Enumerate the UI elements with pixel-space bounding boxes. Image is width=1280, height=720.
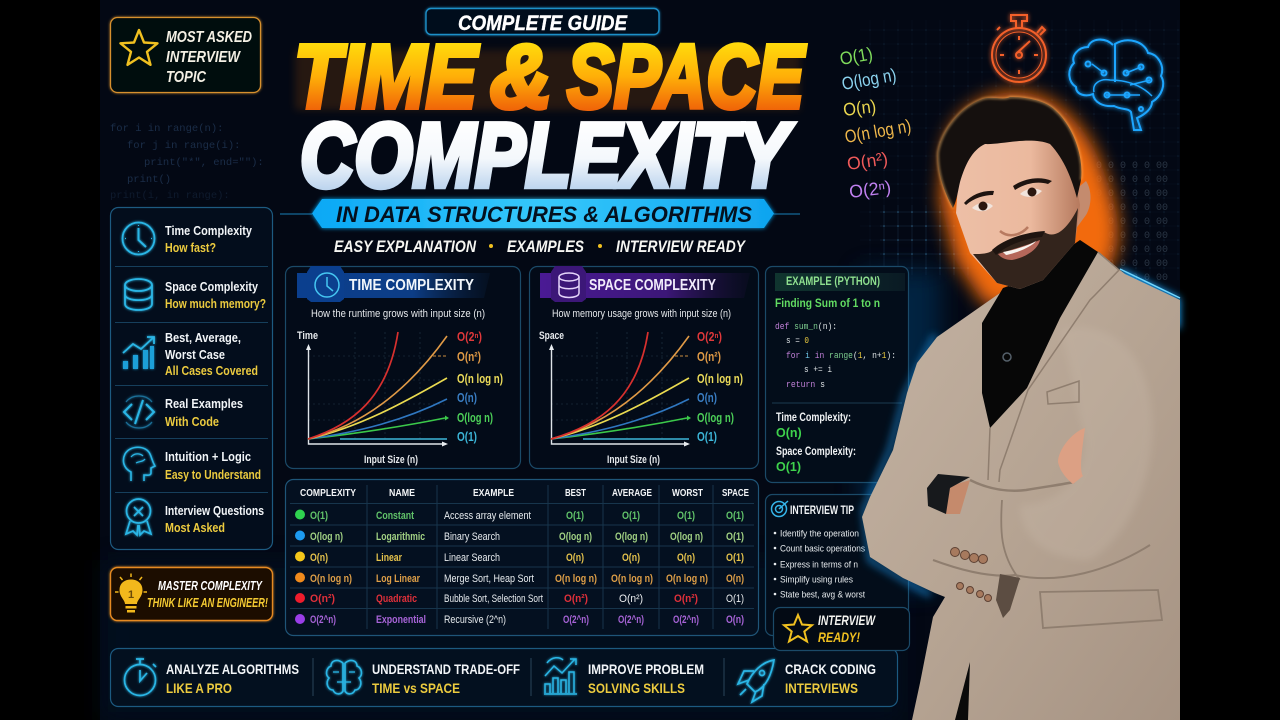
text: best average worst: Best, Average, — [165, 331, 241, 345]
row: constant — [295, 510, 744, 522]
row: log linear — [295, 572, 744, 585]
row: linear: O(n) — [622, 552, 640, 564]
code block: for i in range(1, n+1): — [786, 350, 896, 361]
code block: def sum_n(n): — [775, 321, 837, 332]
row: constant: O(1) — [310, 510, 328, 522]
callout text — [147, 579, 268, 610]
row: exponential: Exponential — [376, 614, 426, 626]
wrist hand and watch — [927, 474, 970, 514]
badge: most asked interview topic — [110, 18, 260, 92]
subtitle line: INTERVIEW READY — [616, 237, 746, 256]
text: understand trade-off — [372, 661, 520, 696]
panel: time complexity chart — [286, 266, 520, 468]
icon: head with brain — [123, 447, 155, 481]
row: linear — [295, 552, 744, 564]
text: analyze algorithms — [166, 661, 299, 696]
complexity result — [776, 412, 856, 474]
panel: bottom benefits strip — [110, 648, 898, 706]
text: improve problem: IMPROVE PROBLEM — [588, 661, 704, 677]
row: quadratic — [295, 593, 744, 605]
row: exponential: O(2^n) — [310, 614, 336, 626]
binary digits backdrop: 0 0 0 0 0 00 — [1096, 259, 1168, 270]
handwritten complexity notes: O(n log n) — [843, 116, 913, 147]
handwritten complexity notes: O(log n) — [840, 65, 898, 94]
binary digits backdrop: 0 0 0 0 0 00 — [1096, 231, 1168, 242]
text: best average worst — [165, 331, 258, 378]
binary digits backdrop: 0 0 0 0 0 00 — [1096, 217, 1168, 228]
row: log linear: O(n log n) — [611, 573, 653, 585]
text: interview questions — [165, 504, 264, 535]
row: exponential: O(2^n) — [563, 614, 589, 626]
table header: NAME — [389, 487, 415, 499]
chart labels: O(log n) — [697, 411, 734, 425]
chart labels: O(n) — [457, 391, 477, 405]
text: space complexity — [165, 280, 266, 311]
panel: time complexity chart: How the runtime grows with input size (n) — [311, 308, 485, 320]
row: logarithmic: O(log n) — [559, 531, 592, 543]
text: space complexity: Space Complexity — [165, 280, 258, 294]
text: analyze algorithms: LIKE A PRO — [166, 680, 232, 696]
row: logarithmic: O(1) — [726, 531, 744, 543]
code block: s = 0 — [786, 335, 809, 346]
binary digits backdrop: 0 0 0 0 0 00 — [1096, 203, 1168, 214]
badge: interview ready — [774, 608, 910, 650]
icon: bar chart — [123, 337, 154, 369]
tip list: Express in terms of n — [780, 560, 858, 570]
callout text: MASTER COMPLEXITY — [158, 579, 263, 593]
hair — [938, 97, 1081, 208]
badge: interview ready: INTERVIEW — [818, 612, 876, 628]
text: crack coding: INTERVIEWS — [785, 680, 858, 696]
chart labels: O(n²) — [697, 350, 721, 364]
subtitle line: EASY EXPLANATION — [334, 237, 477, 256]
panel: topics sidebar — [110, 208, 272, 550]
text: crack coding: CRACK CODING — [785, 661, 876, 677]
row: quadratic: O(n²) — [619, 593, 643, 605]
row: exponential: O(2^n) — [673, 614, 699, 626]
icon: neon stopwatch — [992, 15, 1046, 82]
row: exponential — [295, 614, 744, 626]
header ribbon — [297, 266, 490, 302]
text: understand trade-off: UNDERSTAND TRADE-OFF — [372, 661, 520, 677]
row: exponential: O(2^n) — [618, 614, 644, 626]
panel: python example — [766, 266, 908, 482]
line chart — [549, 332, 691, 446]
binary digits backdrop: 0 0 0 0 0 00 — [1096, 189, 1168, 200]
icon: database — [125, 279, 152, 310]
text: improve problem: SOLVING SKILLS — [588, 680, 685, 696]
panel: space complexity chart — [530, 266, 758, 468]
background code snippet: print() — [127, 174, 171, 186]
handwritten complexity notes: O(n) — [842, 96, 877, 120]
text: real examples: Real Examples — [165, 397, 243, 411]
badge text: INTERVIEW — [166, 49, 242, 66]
panel: time complexity chart: Input Size (n) — [364, 454, 418, 466]
text: crack coding — [785, 661, 876, 696]
panel: space complexity chart: Input Size (n) — [607, 454, 660, 466]
chart labels: O(2ⁿ) — [697, 330, 722, 344]
panel: python example: Finding Sum of 1 to n — [775, 296, 880, 310]
icon: neon brain — [1069, 40, 1163, 130]
badge: interview ready: READY! — [818, 629, 860, 645]
shirt button — [1003, 353, 1011, 361]
chart labels — [697, 330, 743, 444]
chart labels: O(2ⁿ) — [457, 330, 482, 344]
row: log linear: O(n log n) — [555, 573, 597, 585]
chart labels: O(1) — [697, 430, 717, 444]
ribbon: in data structures and algorithms: IN DATA STRUCTURES & ALGORITHMS — [336, 202, 752, 227]
row: constant: O(1) — [566, 510, 584, 522]
text: improve problem — [588, 661, 704, 696]
line chart — [306, 332, 449, 446]
panel: time complexity chart: Time — [297, 330, 318, 342]
handwritten complexity notes: O(n²) — [846, 148, 889, 174]
handwritten complexity notes — [838, 44, 913, 202]
header ribbon: SPACE COMPLEXITY — [589, 277, 716, 294]
icon: code — [124, 396, 154, 428]
panel: space complexity chart: How memory usage grows with input size (n) — [552, 308, 731, 320]
background code snippet — [110, 123, 264, 202]
panel: python example: EXAMPLE (PYTHON) — [786, 276, 880, 288]
icon: light bulb — [115, 574, 147, 612]
handwritten complexity notes: O(1) — [838, 44, 874, 69]
tip list: State best, avg & worst — [780, 590, 865, 600]
row: log linear: O(n) — [726, 573, 744, 585]
handwritten complexity notes: O(2ⁿ) — [848, 177, 892, 202]
tip list: Identify the operation — [780, 528, 859, 540]
row: logarithmic: O(log n) — [310, 531, 343, 543]
text: real examples: With Code — [165, 415, 219, 429]
table header — [300, 487, 749, 499]
row: quadratic: Quadratic — [376, 593, 417, 605]
row: logarithmic: Logarithmic — [376, 531, 425, 543]
title: time and space: & — [490, 28, 552, 128]
complexity result: O(1) — [776, 460, 801, 474]
hand and fingers — [1058, 428, 1085, 484]
lighter sleeve highlight — [1020, 328, 1152, 560]
subtitle line: EXAMPLES — [507, 237, 585, 256]
row: log linear: Merge Sort, Heap Sort — [444, 573, 534, 585]
row: linear: Linear — [376, 552, 403, 564]
table header: AVERAGE — [612, 487, 652, 499]
jacket — [862, 252, 1180, 720]
cyan edge highlights — [1120, 269, 1180, 620]
row: quadratic: O(1) — [726, 593, 744, 605]
row: log linear: O(n log n) — [310, 573, 352, 585]
panel: interview tip — [766, 494, 908, 636]
text: real examples — [165, 397, 243, 429]
portrait: presenter — [862, 92, 1180, 720]
row: constant: O(1) — [622, 510, 640, 522]
subtitle line — [334, 237, 746, 256]
shirt — [982, 240, 1098, 428]
title: time and space — [294, 28, 806, 128]
badge text — [166, 29, 252, 86]
row: logarithmic: O(log n) — [615, 531, 648, 543]
icon: star — [784, 615, 812, 642]
chart labels: O(n²) — [457, 350, 481, 364]
row: log linear: O(n log n) — [666, 573, 708, 585]
background code snippet: print(i, in range): — [110, 190, 230, 202]
beard — [973, 208, 1078, 289]
title: time and space: SPACE — [567, 28, 806, 128]
badge text: MOST ASKED — [166, 29, 252, 46]
title: time and space: TIME — [294, 28, 480, 128]
complexity result: Time Complexity: — [776, 412, 851, 424]
row: constant: O(1) — [677, 510, 695, 522]
code block — [775, 321, 896, 390]
mouth — [998, 240, 1040, 260]
binary digits backdrop: 0 0 0 0 0 00 — [1096, 175, 1168, 186]
table header: BEST — [565, 487, 586, 499]
chart labels: O(n log n) — [697, 372, 743, 386]
table header: COMPLEXITY — [300, 487, 356, 499]
binary digits backdrop: 0 0 0 0 0 00 — [1096, 245, 1168, 256]
text: space complexity: How much memory? — [165, 297, 266, 311]
binary digits backdrop: 0 0 0 0 0 00 — [1096, 273, 1168, 284]
complexity result: O(n) — [776, 426, 802, 440]
row: constant: Access array element — [444, 510, 531, 522]
jacket vent — [955, 662, 970, 720]
callout text: THINK LIKE AN ENGINEER! — [147, 596, 268, 610]
complexity result: Space Complexity: — [776, 446, 856, 458]
table header: SPACE — [722, 487, 749, 499]
icon: clock — [315, 273, 339, 297]
icon: brain — [327, 660, 361, 694]
row: constant: O(1) — [726, 510, 744, 522]
row: quadratic: Bubble Sort, Selection Sort — [444, 593, 543, 605]
icon: award ribbon — [126, 499, 151, 535]
table header: WORST — [672, 487, 703, 499]
panel: interview tip: INTERVIEW TIP — [790, 505, 854, 517]
jacket folds and lapels — [933, 252, 1162, 628]
tip list — [774, 528, 865, 600]
eyes and brows — [964, 178, 1052, 211]
icon: growth chart — [544, 658, 577, 694]
text: analyze algorithms: ANALYZE ALGORITHMS — [166, 661, 299, 677]
row: linear: O(n) — [677, 552, 695, 564]
shadow under folded arm — [996, 574, 1020, 618]
cyan rim glow — [864, 268, 1180, 595]
text: time complexity — [165, 224, 252, 255]
row: logarithmic — [295, 530, 744, 543]
row: logarithmic: O(log n) — [670, 531, 703, 543]
sleeve buttons — [950, 548, 992, 602]
row: quadratic: O(n²) — [310, 593, 335, 605]
header ribbon: TIME COMPLEXITY — [349, 277, 474, 294]
icon: target — [772, 501, 788, 516]
ribbon: in data structures and algorithms — [280, 199, 800, 228]
text: interview questions: Most Asked — [165, 521, 225, 535]
table: complexity comparison — [286, 480, 758, 636]
code block: s += i — [804, 364, 832, 375]
header ribbon — [540, 266, 750, 302]
row: exponential: O(n) — [726, 614, 744, 626]
code block: return s — [786, 379, 825, 390]
text: best average worst: All Cases Covered — [165, 364, 258, 378]
tip list: Count basic operations — [780, 544, 865, 554]
row: constant: Constant — [376, 510, 414, 522]
moustache — [992, 231, 1045, 255]
chart labels: O(log n) — [457, 411, 493, 425]
badge text: TOPIC — [166, 69, 206, 86]
text: intuition logic — [165, 450, 261, 482]
row: quadratic: O(n²) — [674, 593, 698, 605]
row: logarithmic: Binary Search — [444, 531, 500, 543]
orange glow — [940, 92, 1118, 310]
row: linear: Linear Search — [444, 552, 500, 564]
row: log linear: Log Linear — [376, 573, 421, 585]
chart labels: O(1) — [457, 430, 477, 444]
nose — [1000, 227, 1028, 235]
icon: light bulb: 1 — [128, 589, 134, 601]
chart labels: O(n log n) — [457, 372, 503, 386]
icon: star — [120, 30, 158, 65]
text: interview questions: Interview Questions — [165, 504, 264, 518]
icon: rocket — [738, 660, 774, 702]
icon: stopwatch — [124, 659, 156, 696]
callout: master complexity — [110, 568, 272, 620]
text: intuition logic: Intuition + Logic — [165, 450, 251, 464]
row: linear: O(n) — [310, 552, 328, 564]
text: understand trade-off: TIME vs SPACE — [372, 680, 460, 696]
icon: database — [559, 273, 579, 298]
background code snippet: print("*", end=""): — [144, 157, 264, 169]
chart labels — [457, 330, 503, 444]
title: complexity: COMPLEXITY — [300, 106, 794, 206]
text: time complexity: Time Complexity — [165, 224, 252, 238]
text: intuition logic: Easy to Understand — [165, 468, 261, 482]
tip list: Simplify using rules — [780, 574, 853, 586]
row: quadratic: O(n²) — [564, 593, 588, 605]
background code snippet: for i in range(n): — [110, 123, 223, 135]
binary digits backdrop: 0 0 0 0 0 00 — [1096, 161, 1168, 172]
chart labels: O(n) — [697, 391, 717, 405]
icon: clock — [122, 222, 154, 254]
binary digits backdrop — [1096, 161, 1168, 284]
panel: space complexity chart: Space — [539, 330, 564, 342]
row: exponential: Recursive (2^n) — [444, 614, 506, 626]
table header: EXAMPLE — [473, 487, 514, 499]
row: linear: O(1) — [726, 552, 744, 564]
background code snippet: for j in range(i): — [127, 140, 240, 152]
row: linear: O(n) — [566, 552, 584, 564]
badge: complete guide: COMPLETE GUIDE — [458, 12, 628, 35]
text: time complexity: How fast? — [165, 241, 216, 255]
text: best average worst: Worst Case — [165, 348, 225, 362]
head — [938, 97, 1090, 289]
